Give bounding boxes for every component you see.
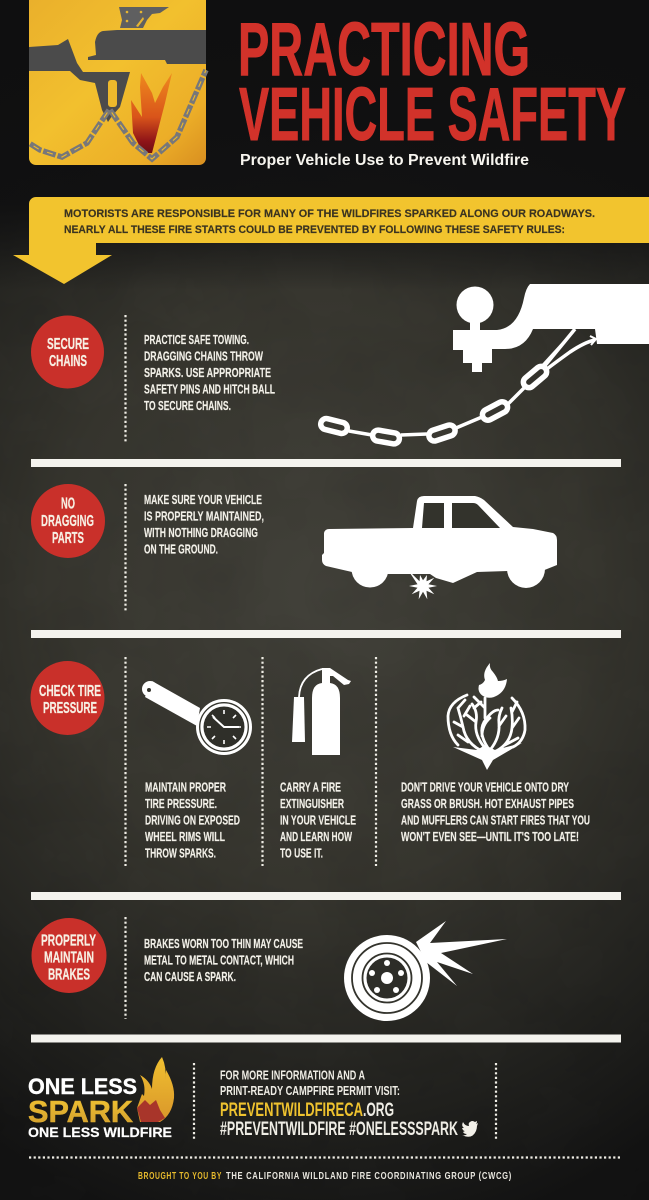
text: extinguisher instructions: EXTINGUISHER xyxy=(280,797,344,811)
text: secure chains instructions: SAFETY PINS AND HITCH BALL xyxy=(144,382,275,396)
icon: pickup truck with spark xyxy=(322,496,557,599)
badge: no dragging parts xyxy=(31,484,105,558)
credit line xyxy=(138,1171,512,1182)
text: no dragging parts instructions: IS PROPERLY MAINTAINED, xyxy=(144,510,264,524)
text: tire pressure instructions xyxy=(145,780,240,860)
icon: hitch and flame photo panel xyxy=(29,0,206,165)
text: secure chains instructions: PRACTICE SAFE TOWING. xyxy=(144,333,249,347)
intro banner with arrow xyxy=(13,197,649,284)
text: more information and links: FOR MORE INFORMATION AND A xyxy=(220,1068,365,1082)
panel: properly maintain brakes xyxy=(32,917,507,1021)
text: tire pressure instructions: WHEEL RIMS WILL xyxy=(145,830,225,844)
text: dry grass warning: DON'T DRIVE YOUR VEHICLE ONTO DRY xyxy=(401,780,569,794)
icon: logo flame xyxy=(137,1057,174,1122)
text: tire pressure instructions: MAINTAIN PROPER xyxy=(145,780,226,794)
credit line: THE CALIFORNIA WILDLAND FIRE COORDINATING GROUP (CWCG) xyxy=(226,1171,512,1182)
text: more information and links: .ORG xyxy=(363,1100,394,1121)
text: more information and links xyxy=(220,1068,458,1140)
icon: burning brush xyxy=(448,663,525,770)
intro banner with arrow: MOTORISTS ARE RESPONSIBLE FOR MANY OF THE WILDFIRES SPARKED ALONG OUR ROADWAYS. xyxy=(64,208,595,220)
intro banner with arrow: NEARLY ALL THESE FIRE STARTS COULD BE PREVENTED BY FOLLOWING THESE SAFETY RULES: xyxy=(64,224,565,236)
text: extinguisher instructions: IN YOUR VEHICLE xyxy=(280,814,356,828)
badge: secure chains: SECURE xyxy=(47,336,89,353)
credit line: BROUGHT TO YOU BY xyxy=(138,1171,222,1182)
text: dry grass warning xyxy=(401,780,590,844)
panel: no dragging parts xyxy=(31,484,557,612)
badge: properly maintain brakes xyxy=(32,918,106,993)
text: no dragging parts instructions: ON THE GROUND. xyxy=(144,542,218,556)
badge: no dragging parts: DRAGGING xyxy=(41,513,94,530)
text: extinguisher instructions: CARRY A FIRE xyxy=(280,780,341,794)
text: extinguisher instructions: AND LEARN HOW xyxy=(280,830,352,844)
text: secure chains instructions xyxy=(144,333,275,413)
logo: one less spark: ONE LESS xyxy=(28,1074,137,1099)
panel: secure chains xyxy=(31,284,649,445)
text: brakes instructions: METAL TO METAL CONTACT, WHICH xyxy=(144,954,294,968)
subtitle: Proper Vehicle Use to Prevent Wildfire xyxy=(240,152,529,169)
text: secure chains instructions: SPARKS. USE APPROPRIATE xyxy=(144,366,271,380)
text: secure chains instructions: DRAGGING CHAINS THROW xyxy=(144,350,263,364)
badge: check tire pressure: PRESSURE xyxy=(43,700,97,717)
text: extinguisher instructions: TO USE IT. xyxy=(280,846,323,860)
icon: trailer hitch xyxy=(453,284,649,372)
text: no dragging parts instructions: WITH NOTHING DRAGGING xyxy=(144,526,258,540)
icon: dragging chain xyxy=(320,329,596,445)
text: more information and links: #PREVENTWILDFIRE #ONELESSSPARK xyxy=(220,1119,458,1140)
text: no dragging parts instructions: MAKE SURE YOUR VEHICLE xyxy=(144,493,262,507)
text: more information and links: PREVENTWILDFIRECA xyxy=(220,1100,363,1121)
panel: check tire pressure xyxy=(30,657,590,866)
logo: one less spark: ONE LESS WILDFIRE xyxy=(28,1124,172,1140)
icon: spark burst xyxy=(408,570,437,599)
badge: no dragging parts: NO xyxy=(61,496,75,512)
text: dry grass warning: GRASS OR BRUSH. HOT EXHAUST PIPES xyxy=(401,797,574,811)
text: extinguisher instructions xyxy=(280,780,356,860)
text: more information and links: PRINT-READY CAMPFIRE PERMIT VISIT: xyxy=(220,1083,400,1098)
icon: twitter bird xyxy=(462,1121,478,1137)
badge: secure chains: CHAINS xyxy=(49,353,87,370)
logo: one less spark: SPARK xyxy=(28,1094,134,1129)
badge: properly maintain brakes: BRAKES xyxy=(48,966,90,984)
text: tire pressure instructions: TIRE PRESSURE. xyxy=(145,797,217,811)
text: dry grass warning: WON'T EVEN SEE—UNTIL IT'S TOO LATE! xyxy=(401,830,579,844)
badge: check tire pressure xyxy=(30,661,104,735)
title xyxy=(238,7,626,156)
text: secure chains instructions: TO SECURE CHAINS. xyxy=(144,399,231,413)
badge: properly maintain brakes: MAINTAIN xyxy=(44,950,94,966)
text: tire pressure instructions: THROW SPARKS. xyxy=(145,846,216,860)
badge: properly maintain brakes: PROPERLY xyxy=(41,932,96,950)
icon: wheel with sparks xyxy=(344,921,507,1021)
text: tire pressure instructions: DRIVING ON EXPOSED xyxy=(145,814,240,828)
badge: secure chains xyxy=(31,316,104,388)
icon: fire extinguisher xyxy=(292,668,351,755)
logo: one less spark xyxy=(28,1057,174,1140)
badge: no dragging parts: PARTS xyxy=(52,530,84,547)
text: no dragging parts instructions xyxy=(144,493,264,556)
badge: check tire pressure: CHECK TIRE xyxy=(39,683,101,700)
text: brakes instructions: CAN CAUSE A SPARK. xyxy=(144,970,236,984)
text: brakes instructions xyxy=(144,937,303,984)
icon: tire pressure gauge xyxy=(142,681,252,755)
text: brakes instructions: BRAKES WORN TOO THIN MAY CAUSE xyxy=(144,937,303,951)
